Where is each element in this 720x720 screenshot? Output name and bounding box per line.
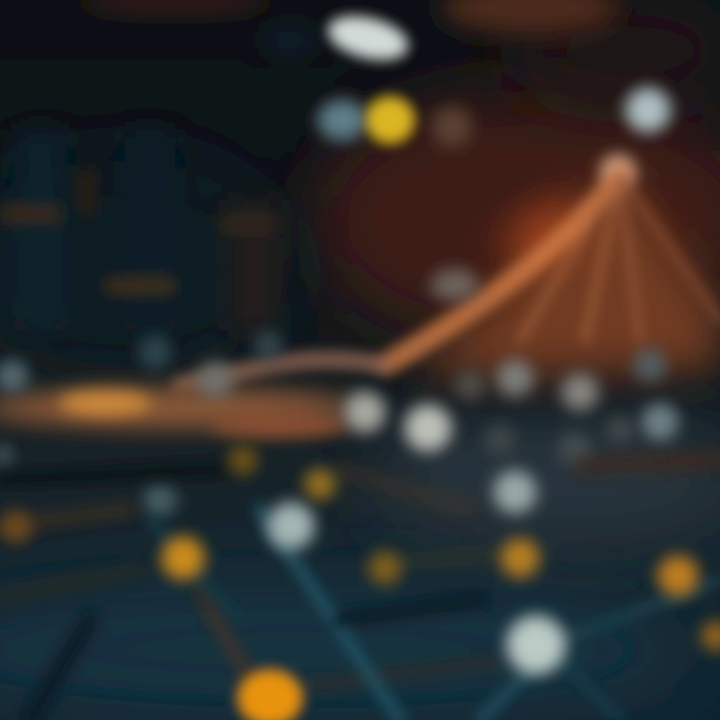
dark teal network lines: [0, 470, 720, 720]
brown connecting bars: [0, 460, 720, 685]
pale light upper right: [626, 88, 670, 132]
orange peak glow: [410, 155, 720, 375]
yellow light with neighbours: [318, 97, 472, 147]
radiating orange lines from the peak: [180, 175, 720, 385]
top brown glows: [80, 0, 620, 54]
white oval light: [325, 10, 411, 66]
orange nodes: [1, 446, 720, 720]
upper grey nodes: [0, 331, 678, 516]
orange horizontal band: [0, 269, 479, 437]
bright white nodes: [268, 392, 565, 674]
dark towers with amber stripes: [0, 130, 280, 330]
